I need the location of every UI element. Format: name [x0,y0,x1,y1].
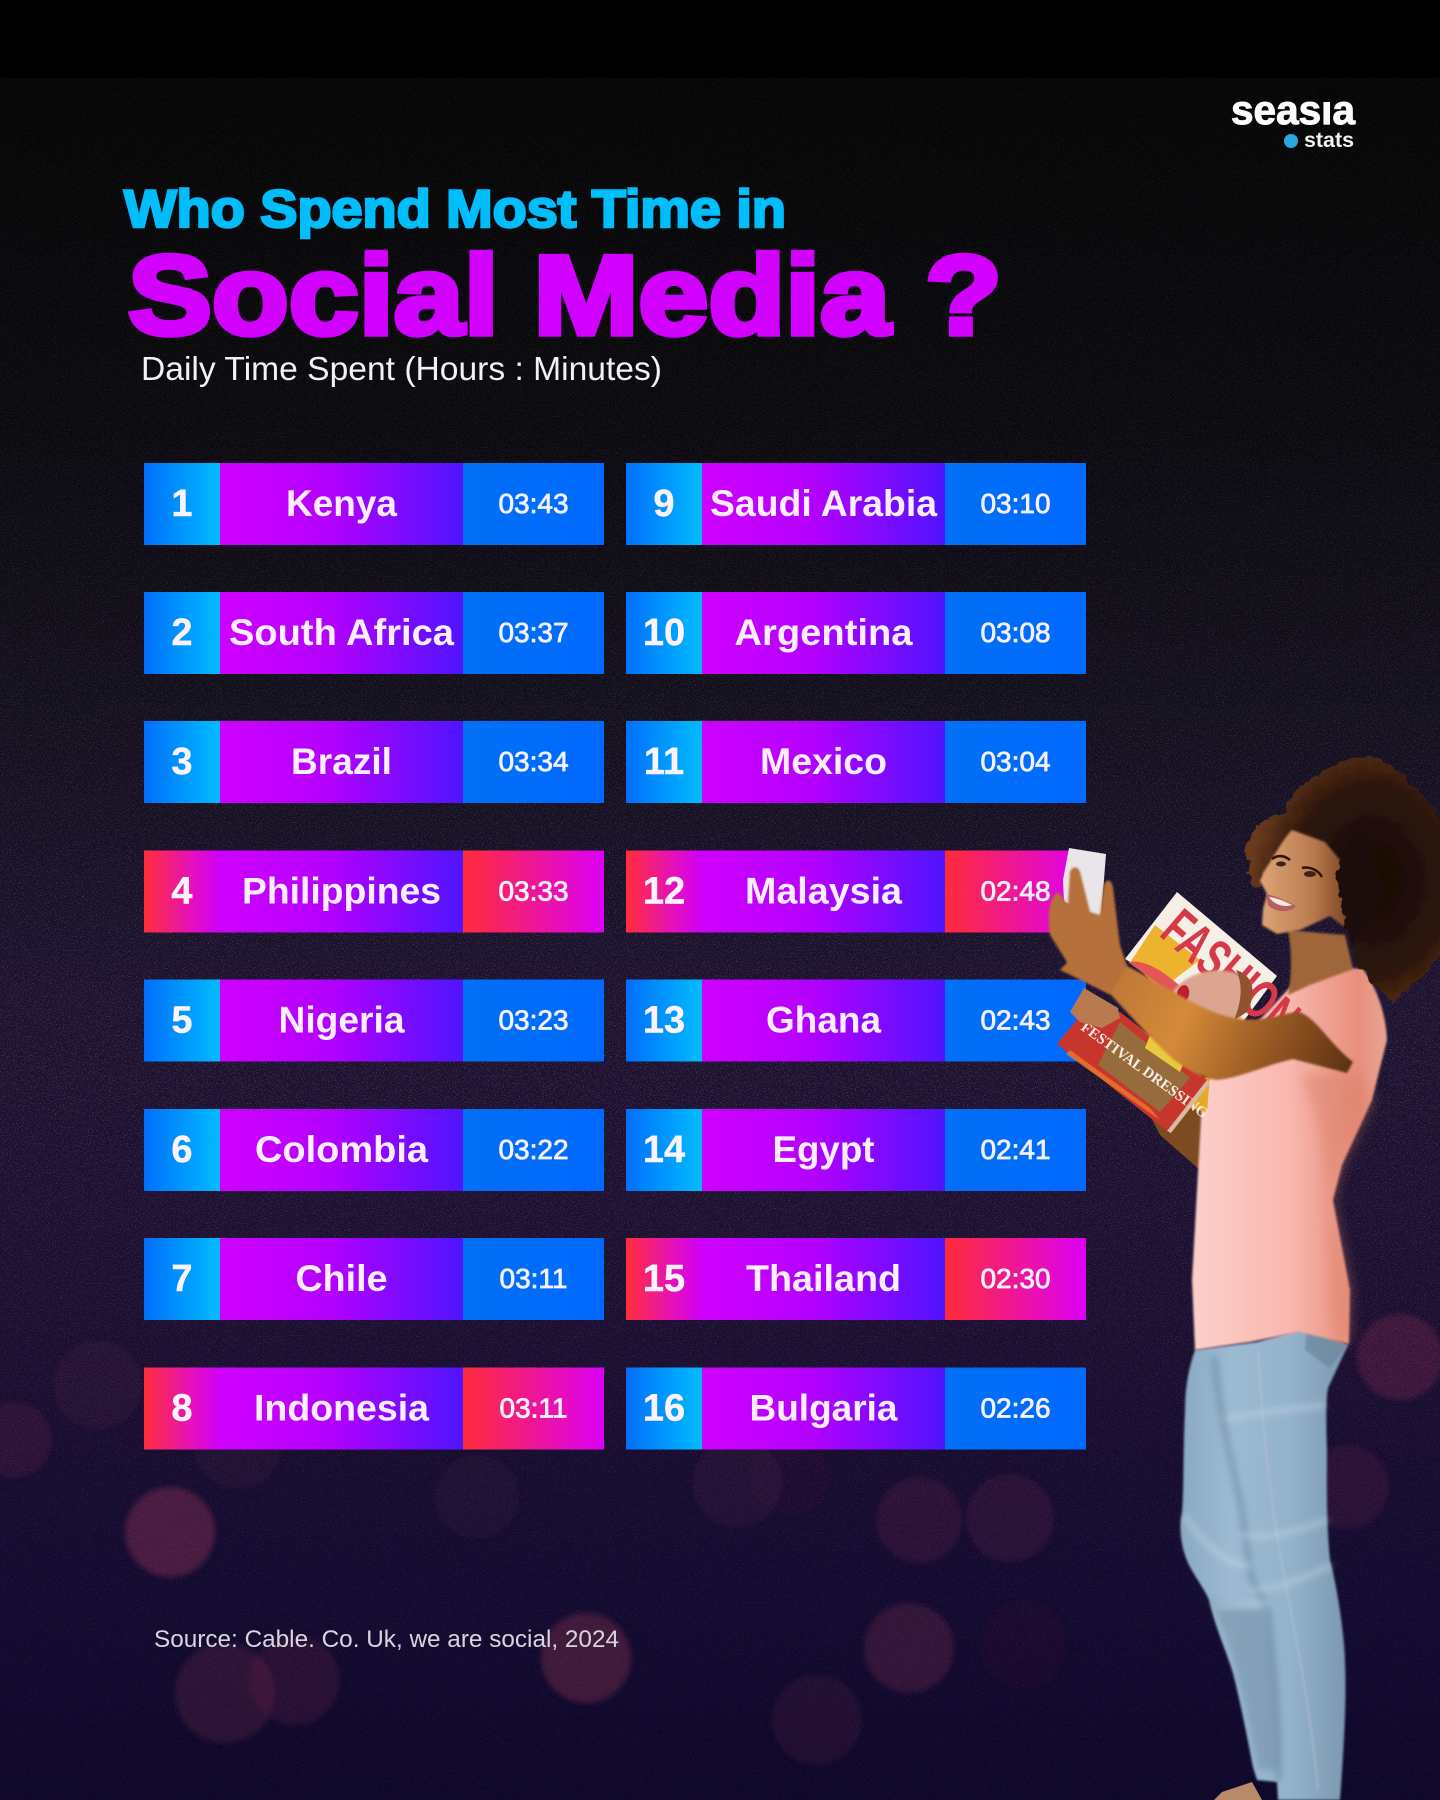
row 3 Brazil: 3 [171,741,193,783]
row 13 Ghana: 02:43 [980,1004,1051,1036]
row 11 Mexico: 03:04 [980,746,1051,777]
row 9 Saudi Arabia [626,463,1086,545]
raised arm [1060,944,1353,1080]
front hair shadow [1338,830,1385,945]
row 10 Argentina: 10 [643,612,685,654]
row 2 South Africa: 2 [171,612,193,654]
row 10 Argentina: 03:08 [980,617,1051,648]
row 15 Thailand: Thailand [746,1258,901,1299]
row 12 Malaysia: Malaysia [745,870,902,912]
jeans [1180,1328,1348,1800]
row 9 Saudi Arabia: 03:10 [980,488,1051,519]
row 16 Bulgaria: Bulgaria [750,1388,898,1428]
face [1260,830,1348,934]
row 7 Chile: 03:11 [500,1263,568,1294]
row 9 Saudi Arabia: 9 [653,483,675,525]
row 5 Nigeria: 5 [171,1000,193,1042]
ranking table [144,463,1086,1450]
row 3 Brazil [144,721,604,803]
row 9 Saudi Arabia: Saudi Arabia [710,483,937,524]
row 12 Malaysia: 12 [643,870,685,912]
hair [1247,758,1440,1003]
illustration: girl taking a selfie with magazines [1049,758,1440,1800]
row 7 Chile: 7 [171,1258,193,1300]
selfie hand [1049,868,1127,994]
row 16 Bulgaria: 02:26 [980,1392,1051,1424]
row 8 Indonesia: Indonesia [254,1388,429,1428]
row 13 Ghana [626,980,1086,1062]
row 14 Egypt: 14 [643,1129,685,1171]
row 14 Egypt [626,1109,1086,1191]
row 12 Malaysia [626,850,1086,932]
row 15 Thailand: 15 [643,1258,685,1300]
row 8 Indonesia: 8 [171,1388,193,1430]
row 1 Kenya: Kenya [286,483,397,524]
row 16 Bulgaria [626,1368,1086,1450]
row 8 Indonesia: 03:11 [500,1392,568,1424]
row 10 Argentina: Argentina [734,612,913,653]
subtitle: Daily Time Spent (Hours : Minutes) [141,350,662,387]
source note: Source: Cable. Co. Uk, we are social, 2024 [154,1626,619,1653]
lower arm [1150,1100,1205,1170]
title line 2: Social Media ? [128,233,1002,358]
lower hand [1070,988,1120,1028]
row 4 Philippines: Philippines [242,870,441,912]
row 11 Mexico [626,721,1086,803]
row 2 South Africa: 03:37 [498,617,569,648]
row 1 Kenya [144,463,604,545]
row 11 Mexico: Mexico [760,741,887,782]
row 12 Malaysia: 02:48 [980,876,1051,906]
foot [1214,1782,1262,1800]
magazine: fashion [1125,892,1312,1049]
row 5 Nigeria: Nigeria [278,1000,405,1040]
logo: seasia stats: stats [1304,129,1354,152]
row 14 Egypt: 02:41 [980,1134,1051,1165]
phone [1063,848,1106,918]
row 6 Colombia: 6 [171,1129,193,1171]
row 4 Philippines [144,850,604,932]
row 5 Nigeria: 03:23 [498,1004,569,1036]
row 7 Chile [144,1238,604,1320]
magazine: fashion: FASHION [1150,897,1312,1049]
magazine: festival: FESTIVAL DRESSING [1078,1019,1211,1122]
row 2 South Africa [144,592,604,674]
row 6 Colombia [144,1109,604,1191]
row 13 Ghana: Ghana [766,1000,881,1040]
row 13 Ghana: 13 [643,1000,685,1042]
neck [1288,930,1353,995]
row 5 Nigeria [144,980,604,1062]
row 4 Philippines: 4 [171,870,193,912]
row 14 Egypt: Egypt [772,1129,874,1170]
row 1 Kenya: 1 [171,483,193,525]
row 15 Thailand: 02:30 [980,1263,1051,1294]
title line 1: Who Spend Most Time in [124,180,786,239]
row 10 Argentina [626,592,1086,674]
row 2 South Africa: South Africa [229,612,454,653]
row 1 Kenya: 03:43 [498,488,569,519]
row 6 Colombia: 03:22 [498,1134,569,1165]
yellow magazine spine [1180,1075,1210,1112]
row 16 Bulgaria: 16 [643,1388,685,1430]
shirt [1192,968,1387,1350]
row 3 Brazil: 03:34 [498,746,569,777]
bokeh lights [0,1314,1440,1765]
row 7 Chile: Chile [296,1258,388,1299]
logo: seasia stats: seasia [1231,87,1356,133]
row 3 Brazil: Brazil [291,741,392,782]
row 4 Philippines: 03:33 [498,876,569,906]
row 8 Indonesia [144,1368,604,1450]
row 6 Colombia: Colombia [255,1129,428,1170]
row 11 Mexico: 11 [644,741,684,783]
row 15 Thailand [626,1238,1086,1320]
